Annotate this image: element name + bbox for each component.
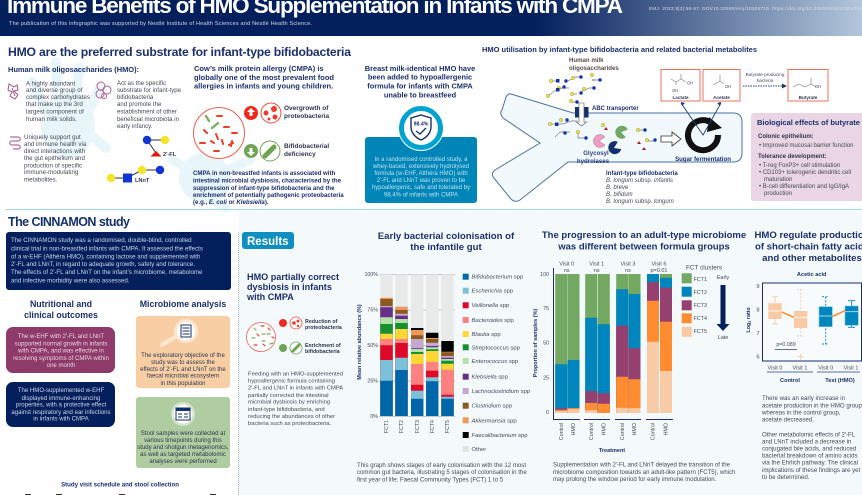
text: other effects: conjugated bile acids, and reduced [762,446,856,453]
icons: glycosyl hydrolases [593,124,646,156]
chart title: was different between formula groups [557,242,730,253]
x axis labels: HMO [632,423,638,435]
box: test visit 0 [819,297,832,344]
x axis labels: FCT3 [415,420,421,433]
section heading: HMO substrate: HMO are the preferred substrate for infant-type bifidobacteria [8,45,351,59]
chart title: the infantile gut [410,242,483,253]
caption: progression: microbiome composition towards an adult-like pattern (FCT5), which [553,470,735,476]
x axis labels [559,423,670,440]
text: randomised study: hypoallergenic, safe and tolerated by [372,185,470,191]
chart legend: Enterococcus spp [472,359,519,365]
visit labels: Visit 3 [621,262,635,268]
icon: gut [10,137,20,149]
diagram: LNnT: LNnT [135,178,150,184]
y axis title: Mean relative abundance (%) [357,304,363,380]
text: dysbiosis: intestinal microbial dysbiosis, characterised by the [193,178,342,184]
y axis labels: 0 [546,410,549,416]
text: specific substrate: beneficial microbiota in [117,116,179,123]
text: specific substrate: early infancy. [117,123,153,130]
visit labels: Visit 1 [589,262,604,268]
y axis labels [540,272,549,416]
y axis labels [364,272,378,420]
x axis labels [384,420,451,433]
group labels [780,378,855,384]
text: randomised study: 98.4% of infants with CMPA [384,192,458,198]
x axis labels: FCT2 [399,420,405,433]
y axis labels: 25% [367,378,378,384]
intro box: and infective morbidity were also assessed. [11,278,130,284]
label: overgrowth: proteobacteria [284,113,330,120]
text: gut and immune health: Uniquely support gut [24,134,81,141]
arrow: early to late: Late [718,335,728,341]
text: gut and immune health: direct interactions with [24,148,86,155]
text: dysbiosis: (e.g., E. coli or Klebsiella). [193,199,269,206]
x axis labels: FCT5 [445,420,451,433]
intro box: 2'-FL and LNnT, in regard to adequate growth, safety and tolerance. [11,261,195,268]
text: feeding: microbial dysbiosis by enriching [248,400,330,406]
text: feeding: 2'-FL and LNnT in infants with CMPA [248,386,343,392]
box: growth outcome: supported normal growth in infants [15,342,107,348]
group labels: Test (HMO) [825,378,855,384]
x axis labels: Visit 0 [818,366,833,372]
x axis labels: Control [559,423,565,440]
y axis title: ratio [746,307,752,321]
text: carbohydrates: A highly abundant [26,80,75,88]
x axis labels: Control [620,423,626,440]
x axis title: Treatment [599,448,625,454]
panel: human milk oligosaccharides [8,65,182,184]
panel: HMO regulate production of metabolites [746,230,862,481]
x axis labels [768,366,858,372]
arrow: to fermentation [661,132,681,146]
box: exploratory objective: The exploratory objective of the [141,353,226,359]
heading: CMPA: globally one of the most prevalent food [194,73,334,82]
x axis labels: Visit 1 [844,366,858,372]
box: test visit 1 [845,301,858,327]
arrow: early to late: Early [717,275,730,281]
list: infant-type bifidobacteria: B. longum subsp. longum [606,199,674,205]
chart legend: Escherichia spp [472,289,514,295]
y axis labels: 9 [756,284,760,290]
arrow: early to late [716,275,730,341]
box: growth outcome [6,327,115,373]
box: exploratory objective: study was to assess the [151,360,216,366]
box: stool samples: analyses were performed [149,459,217,465]
box: immune outcome: against respiratory and ear infections [11,410,111,416]
label: enrichment: bifidobacteria [305,349,340,355]
panel: the CINNAMON study [6,215,231,494]
icon: arrow up overgrowth [244,103,281,123]
intro box: clinical trial in non-breastfed infants with CMPA. It assessed the effects [11,246,203,252]
heading: microbiome analysis: Microbiome analysis [140,299,226,309]
heading: breast milk-identical: Breast milk-identical HMO have [365,64,475,73]
heading: CMPA: Cow’s milk protein allergy (CMPA) is [194,64,324,73]
x axis labels: HMO [602,423,608,435]
heading: HMO utilisation: HMO utilisation by infant-type bifidobacteria and related bacterial metabolites [482,45,757,54]
list: infant-type bifidobacteria: Infant-type bifidobacteria [606,171,678,177]
box: lactate: OH [687,80,693,86]
caption: progression: Supplementation with 2'-FL and LNnT delayed the transition of the [553,462,731,468]
text: dysbiosis: CMPA in non-breastfed infants is associated with [193,170,335,177]
diagram: 2'-FL: 2'-FL [163,152,177,158]
text: other effects: implications of these findings are yet [762,467,861,474]
chart title: The progression to an adult-type microbiome [542,230,746,241]
text: specific substrate: Act as the specific [117,80,166,87]
text: dysbiosis: enrichment of potentially pathogenic proteobacteria [193,192,344,199]
chart legend: Klebsiella spp [472,375,509,381]
chart legend [463,274,531,453]
visit labels: Visit 0 [559,262,574,268]
icon: arrow down deficiency [244,141,280,161]
text: carbohydrates: and diverse group of [26,87,83,94]
heading: breast milk-identical: formula for infants with CMPA [367,82,473,90]
box: immune outcome: properties, with a protective effect [16,402,106,408]
icon: microbes [96,82,111,98]
legend: FCT clusters [682,265,722,337]
text: gut and immune health: production of specific [24,162,82,170]
text: randomised study: whey-based, extensively hydrolysed [372,164,469,170]
chart subtitle: Acetic acid [797,272,827,278]
box: exploratory objective [136,316,230,388]
label and arrow: butyrate-producing bacteria: bacteria [757,78,774,83]
caption: colonisation: common gut bacteria, illustrating 5 stages of colonisation in the [357,469,527,476]
legend: FCT clusters: FCT1 [694,277,707,283]
chart legend: Akkermansia spp [470,418,517,424]
text: randomised study: formula (w-EHF, Althéra HMO) with [374,171,468,177]
box: stool samples: Stool samples were collected at [141,431,226,437]
text: acetate: There was an early increase in [762,395,845,402]
panel: breast milk-identical HMO [365,64,477,203]
box: control visit 1 [794,289,807,360]
text: butyrate effects: • Improved mucosal barrier function [759,143,853,149]
heading: CINNAMON: The CINNAMON study [8,215,130,229]
diagram: 2'-FL [143,136,177,158]
y axis labels: 25 [543,376,549,382]
x axis labels: HMO [664,423,670,435]
visit labels: ns [625,268,631,274]
y axis title: Log [746,323,752,333]
heading: study visit schedule: Study visit schedule and stool collection [61,482,179,488]
label: glycosyl hydrolases: hydrolases [577,158,610,165]
section divider [6,209,862,210]
text: carbohydrates: that make up the 3rd [26,101,83,108]
heading: nutritional and clinical outcomes: clinical outcomes [24,310,98,320]
y axis title: 2 [748,321,752,323]
y axis labels: 8 [756,308,760,314]
intro box: The CINNAMON study was a randomised, double-blind, controlled [11,237,192,244]
y axis labels: 75 [543,306,549,312]
stacked proportion chart [533,268,673,454]
text: randomised study: 2'-FL and LNnT was proven to be [377,178,466,184]
legend: FCT clusters: FCT5 [694,329,707,335]
box: growth outcome: with CMPA, and was effective in [17,348,104,354]
y axis title: Proportion of samples (%) [533,309,539,377]
text: gut and immune health: metabolites. [24,176,58,184]
box: stool samples: as well as targeted metabolomic [140,452,226,458]
visit labels [559,262,667,274]
text: carbohydrates: largest component of [26,108,84,116]
panel: CMPA [193,64,344,206]
x axis labels: FCT1 [384,420,390,433]
results badge [242,232,294,249]
trend lines [782,311,845,317]
label: glycosyl hydrolases: Glycosyl [583,150,609,157]
funding note: The publication of this infographic was supported by Nestlé Institute of Health Sciences and Nestlé Health Science. [9,21,312,27]
box: growth outcome: one month [47,363,75,369]
stacked bar chart [357,272,455,433]
text: gut and immune health: the gut epithelium and [24,155,85,162]
chart legend: Veillonella spp [472,303,510,309]
text: gut and immune health: immune-modulating [24,169,79,176]
box: lactate: OH [672,88,678,93]
group labels: Control [780,378,800,384]
citation: EMJ. 2023;8[3]:56-57. DOI/10.33590/emj/10304719. https://doi.org/10.33590/emj/10304719 [649,6,862,11]
heading: partially correct dysbiosis: with CMPA [246,292,294,302]
heading: breast milk-identical: been added to hypoallergenic [368,72,472,82]
text: acetate: acetate production in the HMO group, [762,402,862,410]
y axis labels [756,284,760,360]
chart legend: Streptococcus spp [472,345,521,351]
box: lactate [661,70,700,101]
intro box: The effects of 2'-FL and LNnT on the infant’s microbiome, metabolome [11,269,203,276]
x axis labels: Visit 0 [768,366,782,372]
x axis labels: HMO [571,423,577,435]
heading: partially correct dysbiosis: HMO partially correct [247,272,339,282]
box: immune outcome: The HMO-supplemented w-EHF [18,388,104,394]
x axis labels: Control [651,423,657,440]
text: other effects: to be determined. [762,474,810,481]
text: other effects: Other metabolomic effects of 2'-FL [762,431,856,438]
chart legend: Lachnoclostridium spp [472,389,531,395]
diagram: corrected gut circle [246,322,276,352]
label: deficiency: Bifidobacterial [284,143,329,150]
panel: HMO utilisation diagram [482,45,862,205]
gut shape [492,94,742,201]
text: other effects: via the Ehrlich pathway. The clinical [762,460,858,467]
heading: nutritional and clinical outcomes: Nutritional and [30,299,92,309]
box: acetate [703,70,740,101]
results badge: Results [247,236,289,248]
box: stool samples: study and shotgun metagenomics, [137,445,229,451]
text: feeding: partially corrected the intestinal [248,393,329,399]
legend: FCT clusters: FCT4 [694,316,707,322]
label and arrow: butyrate-producing bacteria [743,72,787,88]
heading: partially correct dysbiosis: dysbiosis in infants [247,282,332,292]
diagram: LNnT [107,166,164,184]
x axis labels: Control [589,423,595,440]
p value: p=0.089 [776,342,796,348]
box: acetate: Acetate [713,95,730,100]
box: butyrate [788,70,828,101]
text: feeding: reducing the abundances of other [248,414,335,420]
icon: calendar [171,402,195,426]
heading: CMPA: allergies in infants and young children. [194,82,333,90]
box: lactate: Lactate [672,95,689,100]
panel: early bacterial colonisation [357,231,531,484]
hand watermarks [32,62,250,208]
text: feeding: Feeding with an HMO-supplemented [248,372,343,378]
text: butyrate effects: • T-reg FoxP3+ cell stimulation [759,163,840,169]
y axis labels: 7 [756,331,760,337]
y axis labels: 100 [540,272,549,278]
icon: reduction of proteobacteria [279,317,302,329]
text: butyrate effects: Colonic epithelium: [758,134,814,140]
box: butyrate: OH [815,84,821,89]
chart legend: Blautia spp [472,332,501,338]
label: enrichment: Enrichment of [305,343,341,349]
label and arrow: butyrate-producing bacteria: Butyrate-producing [746,72,785,77]
text: acetate: acetate decreased. [762,417,814,424]
subheading: HMO: Human milk oligosaccharides (HMO): [8,65,139,74]
list: infant-type bifidobacteria: B. bifidum [606,192,633,198]
visit labels: p=0.01 [651,268,667,274]
text: feeding: infant-type bifidobacteria, and [248,407,325,413]
label: human milk oligosaccharides: Human milk [569,57,604,64]
chart legend: Other [472,447,486,453]
box: butyrate: Butyrate [799,95,818,100]
ABC transporter: ABC transporter [592,106,639,112]
chart legend: Bacteroides spp [472,318,514,324]
text: randomised study: In a randomised controlled study, a [375,157,468,163]
text: other effects: bacterial breakdown of amino acids [762,453,858,460]
text: butyrate effects: production [764,191,792,197]
chart title: Early bacterial colonisation of [378,231,515,242]
dotted separator [238,232,240,495]
visit labels: Visit 6 [652,262,666,268]
box: exploratory objective: faecal microbial ecosystem [147,374,219,380]
y axis labels: 50% [367,343,378,349]
box plot [746,283,862,384]
panel: progression to adult-type microbiome [533,230,746,483]
list: infant-type bifidobacteria: B. longum subsp. infantis [606,178,673,184]
text: acetate: whereas in the control group, [761,410,841,417]
text: specific substrate: bifidobacteria [117,94,154,101]
ABC transporter [575,103,639,126]
box: control visit 0 [768,297,782,324]
box: immune outcome: in infants with CMPA [33,416,90,422]
visit labels: ns [594,268,600,274]
text: carbohydrates: complex carbohydrates [26,94,90,101]
text: specific substrate: substrate for infant-type [117,87,182,94]
icon: magnifier [162,319,198,345]
y axis labels: 0% [370,414,378,420]
legend: FCT clusters: FCT3 [694,303,707,309]
glycans [548,77,655,141]
text: other effects: and LNnT included a decrease in [762,439,851,446]
box: growth outcome: resolving symptoms of CMPA within [13,356,109,362]
callout box [365,137,477,203]
text: feeding: bacteria such as proteobacteria. [248,421,332,427]
heading: breast milk-identical: unable to breastfeed [384,90,457,100]
box: acetate: OH [725,84,731,89]
box: stool samples: various timepoints during this [144,438,222,444]
label: deficiency: deficiency [284,151,316,158]
x axis labels: Visit 1 [793,366,807,372]
text: feeding: hypoallergenic formula containing [248,378,335,384]
text: butyrate effects: Tolerance development: [758,154,827,160]
panel: biological effects of butyrate [751,113,862,201]
caption: colonisation: This graph shows stages of early colonisation with the 12 most [357,462,526,469]
chart title: and other metabolites [762,253,862,264]
text: specific substrate: establishment of other [117,108,177,116]
intro box: of a w-EHF (Althéra HMO), containing lactose and supplemented with [11,254,201,260]
panel: results dysbiosis [242,232,343,427]
text: dysbiosis: suppression of infant-type bifidobacteria and the [193,185,335,192]
y axis labels: 50 [543,341,549,347]
donut: 98.4%: 98.4% [414,122,429,128]
label: human milk oligosaccharides: oligosaccharides [569,65,619,72]
caption: colonisation: first year of life; Faecal Community Types (FCT) 1 to 5 [357,477,504,484]
box: immune outcome: displayed immune-enhancing [22,396,100,402]
intro box [6,232,231,290]
text: specific substrate: and promote the [117,101,162,108]
x axis labels: FCT4 [430,420,436,433]
timeline markers [25,494,216,495]
heading: biological effects: Biological effects of butyrate [757,118,860,127]
box: exploratory objective: in this population [160,381,206,387]
caption: progression: may prolong the window period for early immune modulation. [553,477,717,483]
y axis labels: 75% [367,308,378,314]
header banner [0,0,862,36]
icon: enrichment of bifidobacteria [279,342,302,354]
legend: FCT clusters: FCT clusters [686,265,722,272]
text: butyrate effects: maturation [764,177,792,183]
label: overgrowth: Overgrowth of [284,105,329,112]
list: infant-type bifidobacteria: B. breve [606,185,629,191]
chart legend: Faecalibacterium spp [472,433,528,439]
text: butyrate effects: • CD103+ tolerogenic dendritic cell [759,170,851,176]
label: reduction: Reduction of [305,319,338,325]
icon: sugar fermentation cycle [681,102,722,150]
box: growth outcome: The w-EHF with 2'-FL and LNnT [18,334,104,340]
icon: carbohydrate [8,84,18,99]
box: exploratory objective: effects of 2'-FL and LNnT on the [140,367,226,373]
label: reduction: proteobacteria [305,325,342,331]
text: carbohydrates: human milk solids. [26,116,77,123]
legend: FCT clusters: FCT2 [694,290,707,296]
visit labels: ns [564,268,570,274]
text: gut and immune health: and immune health via [24,141,87,148]
label: sugar fermentation: Sugar fermentation [675,156,731,163]
chart legend: Bifidobacterium spp [472,275,524,281]
text: butyrate effects: • B-cell differentiation and IgG/IgA [759,184,849,190]
box: immune outcome [6,382,115,427]
chart legend: Clostridium spp [472,404,513,410]
y axis labels: 6 [756,354,760,360]
diagram: dysbiotic gut circle [194,108,244,158]
box: stool samples [136,397,230,468]
y axis labels: 100% [364,272,378,278]
